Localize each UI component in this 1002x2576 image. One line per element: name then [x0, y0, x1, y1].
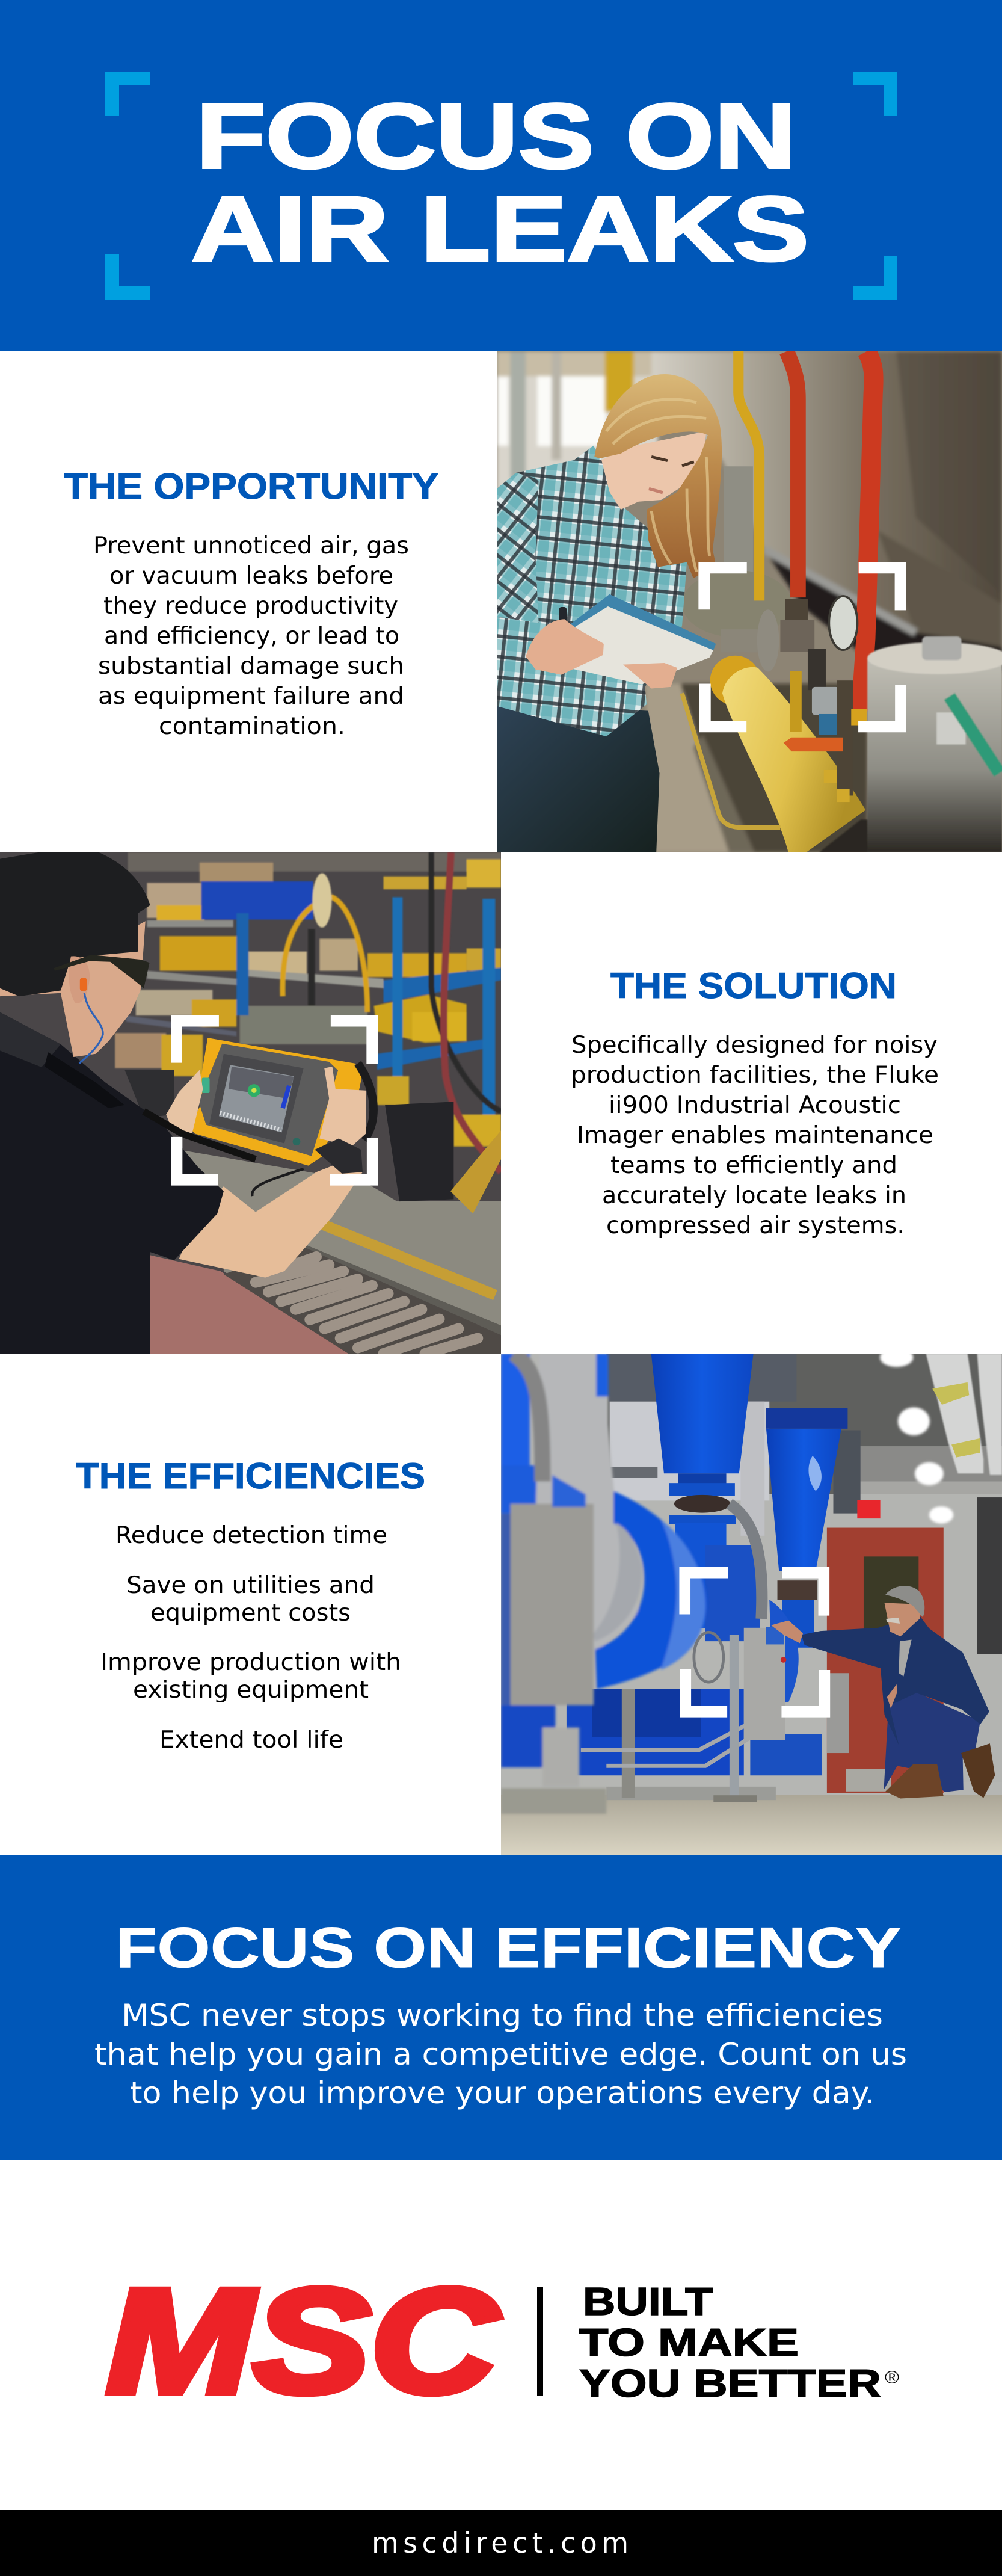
list of efficiencies: Reduce detection time — [115, 1522, 387, 1549]
band: focus on efficiency — [0, 1855, 1002, 2160]
title: FOCUS ON — [196, 85, 796, 188]
body text: the solution: Specifically designed for noisy — [571, 1032, 938, 1059]
registered mark: ® — [885, 2368, 899, 2388]
focus brackets — [171, 1015, 378, 1186]
list of efficiencies: existing equipment — [133, 1677, 369, 1704]
body text: the solution: production facilities, the Fluke — [571, 1062, 939, 1089]
body text: the solution: teams to efficiently and — [610, 1152, 897, 1179]
MSC logo and tagline — [106, 2258, 899, 2424]
floor — [501, 1795, 1002, 1855]
hose coil — [694, 1632, 724, 1682]
closing paragraph: that help you gain a competitive edge. Count on us — [94, 2037, 907, 2072]
panel: the solution — [571, 966, 939, 1239]
yellow main pipe — [722, 667, 865, 852]
panel: the opportunity — [64, 466, 438, 740]
body text: the solution: accurately locate leaks in — [602, 1182, 906, 1209]
body text: the solution: Imager enables maintenance — [577, 1122, 933, 1149]
body text: the solution: compressed air systems. — [606, 1212, 905, 1239]
focus brackets around title — [105, 72, 897, 300]
fittings and handle — [682, 649, 867, 828]
list of efficiencies: Extend tool life — [159, 1727, 343, 1754]
checklist in hands — [526, 594, 716, 688]
photo: worker at blue blower machinery — [501, 1354, 1002, 1855]
body text: the solution — [571, 1032, 939, 1239]
list of efficiencies — [100, 1522, 401, 1754]
heading: focus on efficiency: FOCUS ON EFFICIENCY — [115, 1916, 901, 1979]
tagline: YOU BETTER — [579, 2361, 881, 2405]
waste bins and stand — [124, 1070, 501, 1213]
panel: the efficiencies — [76, 1456, 425, 1754]
body text: the opportunity: and efficiency, or lead to — [104, 623, 399, 650]
roller conveyor — [256, 1257, 478, 1354]
worker — [771, 1586, 995, 1799]
focus brackets — [679, 1567, 830, 1718]
heading: the solution: THE SOLUTION — [610, 966, 897, 1006]
logo wordmark: MSC — [106, 2258, 500, 2424]
website url: mscdirect.com — [372, 2527, 629, 2559]
closing paragraph: MSC never stops working to find the efficiencies — [121, 1998, 883, 2033]
body text: the opportunity: Prevent unnoticed air, gas — [93, 532, 409, 559]
acoustic imager device — [189, 1038, 363, 1166]
central blowers and cones — [567, 1354, 849, 1802]
tagline: TO MAKE — [579, 2320, 799, 2364]
photo: technician using acoustic imager — [0, 852, 501, 1354]
heading: the efficiencies: THE EFFICIENCIES — [76, 1456, 425, 1496]
title — [191, 85, 809, 280]
body text: the opportunity: substantial damage such — [98, 653, 404, 680]
blurred foreground machinery — [501, 1354, 707, 1814]
woman — [497, 374, 722, 852]
closing paragraph: to help you improve your operations every day. — [130, 2075, 874, 2110]
grey cylinder with green hose — [819, 636, 1002, 852]
logo divider — [537, 2287, 543, 2396]
photo: woman inspecting pipes — [497, 351, 1002, 852]
warehouse shelving — [115, 852, 501, 1172]
body text: the opportunity: as equipment failure and — [98, 683, 404, 710]
body text: the solution: ii900 Industrial Acoustic — [609, 1092, 901, 1119]
title: AIR LEAKS — [191, 177, 809, 280]
body text: the opportunity — [93, 532, 409, 740]
footer bar — [0, 2510, 1002, 2576]
list of efficiencies: Save on utilities and — [126, 1572, 375, 1599]
body text: the opportunity: contamination. — [159, 713, 345, 740]
list of efficiencies: equipment costs — [150, 1600, 351, 1627]
heading: the opportunity: THE OPPORTUNITY — [64, 466, 438, 507]
focus brackets — [698, 562, 906, 732]
shop floor — [150, 1150, 501, 1354]
body text: the opportunity: they reduce productivity — [103, 593, 398, 620]
body text: the opportunity: or vacuum leaks before — [109, 562, 393, 590]
technician — [0, 852, 373, 1354]
tagline: BUILT — [583, 2279, 713, 2323]
closing paragraph — [94, 1998, 907, 2110]
header band — [0, 0, 1002, 351]
tagline — [579, 2279, 881, 2405]
ceiling, wall and door — [606, 1348, 1002, 1793]
tank-side pipes and valve — [682, 351, 874, 711]
list of efficiencies: Improve production with — [100, 1649, 401, 1676]
